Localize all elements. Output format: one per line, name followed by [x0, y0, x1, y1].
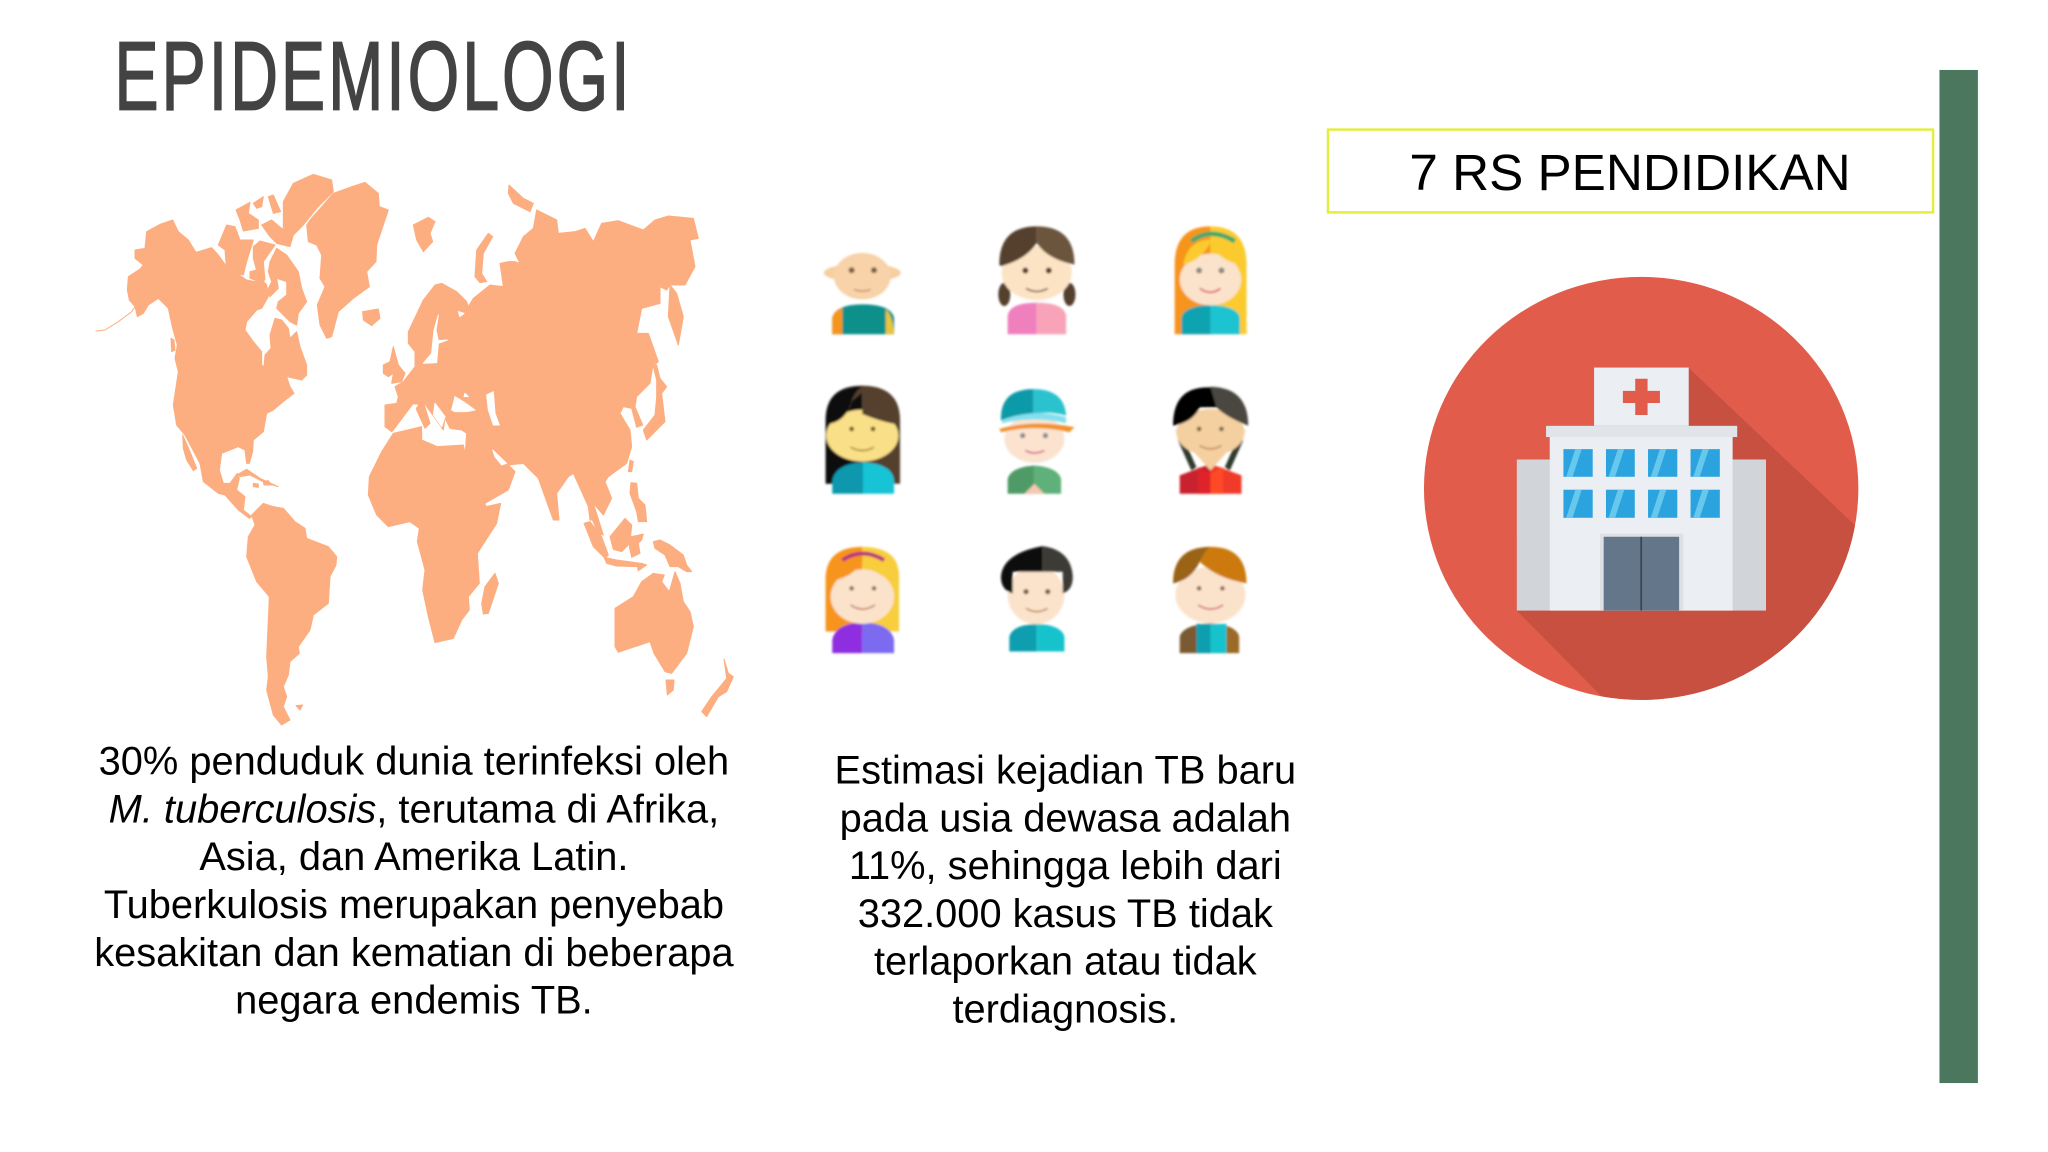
icon: dark-haired woman [826, 386, 900, 494]
hospital door [1600, 534, 1683, 611]
callout: 7 RS Pendidikan: 7 RS PENDIDIKAN [1409, 144, 1851, 201]
icon: girl with black braids [1173, 387, 1248, 494]
map: Kamchatka, Japan and Taiwan [628, 285, 683, 472]
map: South America and Caribbean [238, 469, 337, 725]
map: North America and Arctic [96, 174, 388, 518]
text block: world infection: M. tuberculosis, terutama di Afrika, [109, 787, 719, 831]
map: Indonesia and Philippines [584, 483, 692, 572]
hospital long shadow [1517, 368, 1855, 700]
hospital main block [1550, 434, 1733, 611]
text block: TB estimate: 11%, sehingga lebih dari [849, 844, 1282, 888]
text block: TB estimate: pada usia dewasa adalah [840, 796, 1291, 840]
icon: blonde girl with green band [1175, 226, 1247, 334]
text block: world infection: Tuberkulosis merupakan penyebab [104, 883, 724, 927]
map: North European islands [383, 185, 533, 383]
text block: TB estimate: terlaporkan atau tidak [874, 940, 1257, 984]
text block: TB estimate: terdiagnosis. [952, 987, 1178, 1031]
map: Eurasia mainland [385, 210, 698, 520]
hospital window glints [1566, 449, 1709, 518]
callout: 7 RS Pendidikan [1328, 130, 1933, 212]
map: Canadian Arctic islands [218, 174, 333, 325]
hospital sign tower [1594, 368, 1689, 426]
text block: world infection: 30% penduduk dunia terinfeksi oleh [99, 740, 729, 784]
title: EPIDEMIOLOGI [114, 21, 633, 130]
text block: TB estimate: 332.000 kasus TB tidak [858, 892, 1273, 936]
map: North America mainland [96, 220, 307, 518]
map: South America mainland [247, 503, 337, 725]
icon: girl with brown hair [1173, 547, 1247, 653]
world map [96, 174, 733, 725]
icon: girl with pigtails [998, 226, 1075, 334]
hospital background circle [1424, 277, 1858, 700]
icon: boy with teal cap [999, 389, 1074, 494]
hospital roof [1546, 426, 1737, 437]
icon: boy with black hair [1001, 546, 1073, 651]
side bar [1939, 70, 1978, 1083]
map: Africa [368, 427, 501, 643]
icon: old man [824, 253, 901, 334]
map: Madagascar [482, 573, 498, 614]
map: Australia [615, 572, 693, 695]
text block: world infection: Asia, dan Amerika Latin. [199, 835, 628, 879]
map: inland seas [393, 312, 507, 465]
text block: world infection: negara endemis TB. [235, 979, 593, 1023]
map: New Zealand [702, 659, 733, 717]
map: Africa mainland [368, 427, 501, 643]
map: Greenland [307, 182, 388, 338]
map: Baja and Vancouver island [171, 338, 197, 471]
map: Iceland [363, 309, 380, 326]
text block: world infection: kesakitan dan kematian di beberapa [94, 931, 734, 975]
people icons grid [824, 226, 1248, 653]
map: Caribbean and Falkland islands [238, 469, 303, 710]
text block: world infection [94, 740, 734, 1023]
text block: TB estimate: Estimasi kejadian TB baru [835, 748, 1296, 792]
map: Eurasia [383, 185, 698, 520]
icon: hospital [1424, 276, 1858, 700]
hospital windows [1563, 449, 1720, 518]
text block: TB estimate [835, 748, 1296, 1031]
hospital side wings [1517, 459, 1766, 611]
map: Southeast Asia and Oceania [584, 483, 733, 717]
icon: girl with pink band [826, 547, 899, 653]
hospital red cross [1623, 379, 1660, 415]
